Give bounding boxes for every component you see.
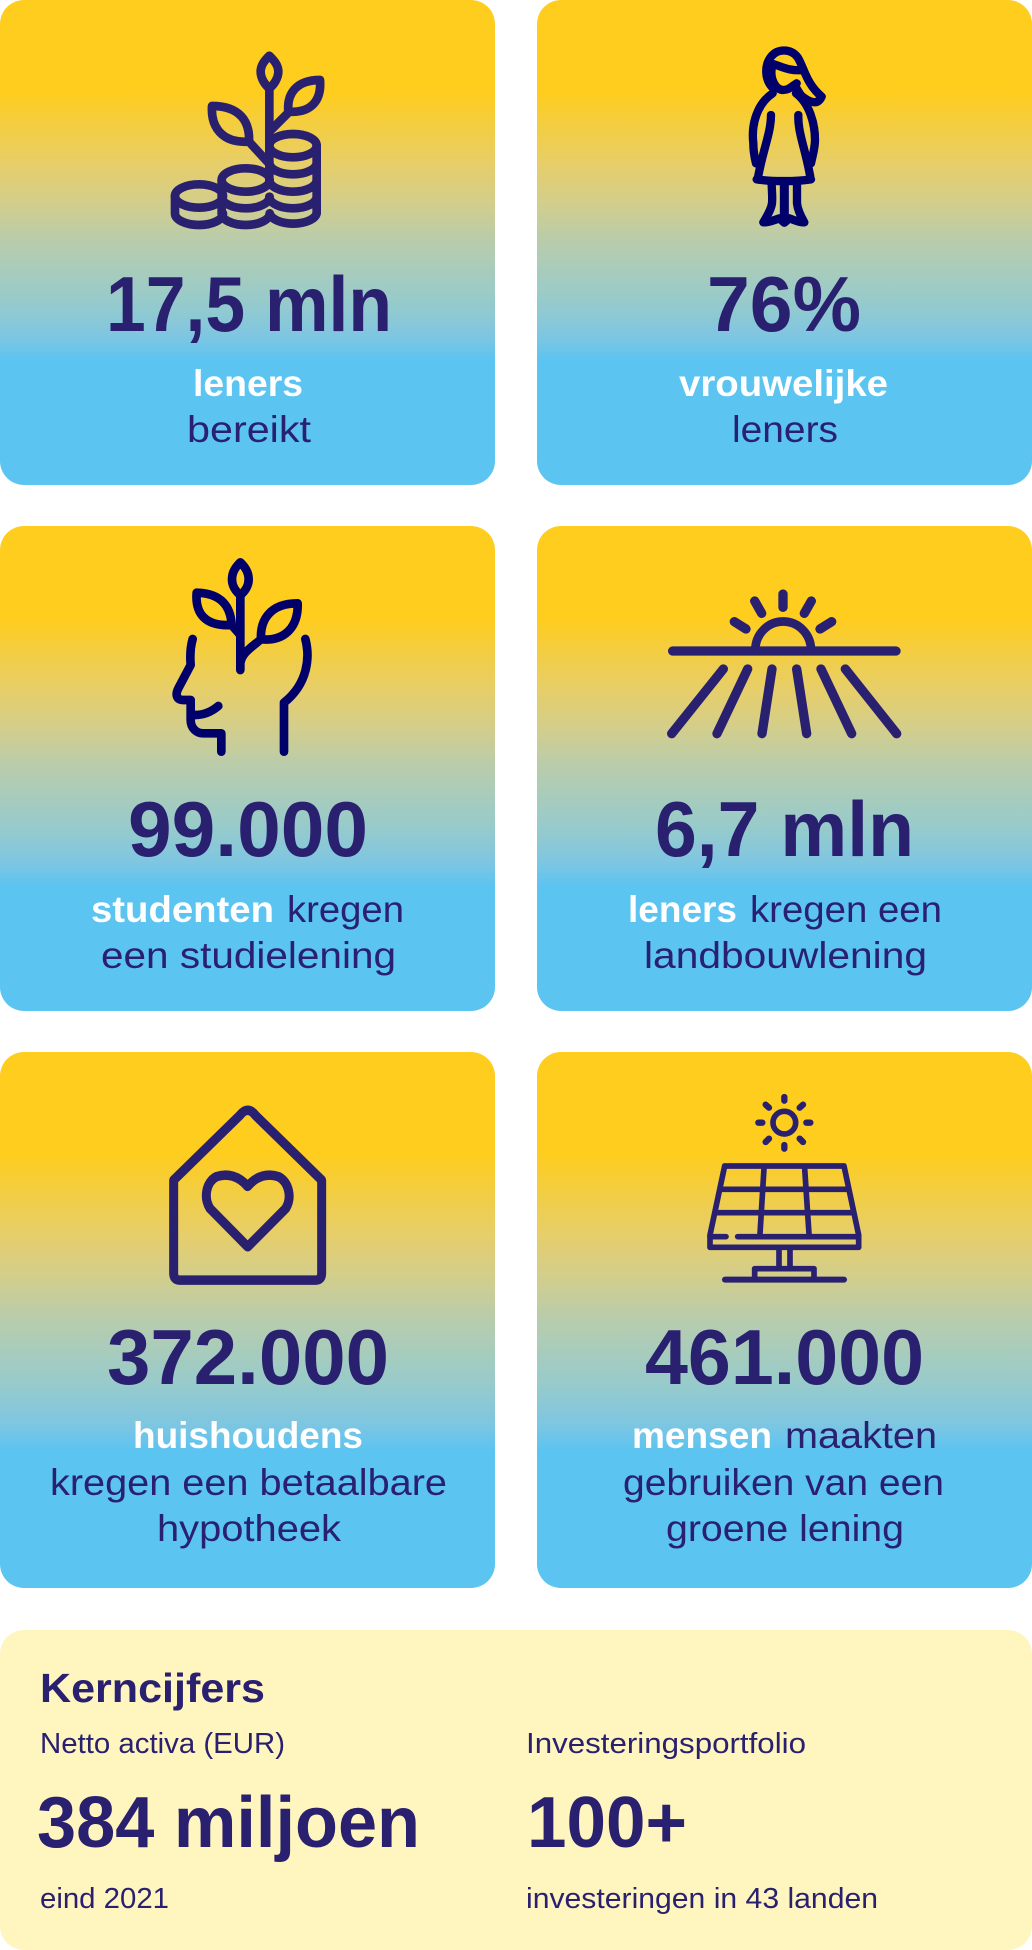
column: investeringsportfolio <box>526 1728 878 1915</box>
label: studenten kregen een studielening <box>91 889 404 976</box>
panel: kerncijfers <box>0 1630 1032 1950</box>
number: 6,7 mln: 6,7 mln <box>655 785 914 873</box>
column: investeringsportfolio: investeringen in 43 landen <box>526 1883 878 1915</box>
label: huishoudens kregen een betaalbare hypotheek: kregen een betaalbare <box>50 1462 447 1503</box>
column: netto activa: eind 2021 <box>40 1883 169 1915</box>
column: investeringsportfolio: 100+ <box>527 1783 687 1863</box>
panel: leners bereikt <box>0 0 495 485</box>
label: mensen maakten gebruiken van een groene lening <box>623 1415 944 1549</box>
panel: huishoudens <box>0 1052 495 1588</box>
column: investeringsportfolio: Investeringsportfolio <box>526 1728 806 1760</box>
number: 76%: 76% <box>707 260 861 348</box>
label: mensen maakten gebruiken van een groene lening: maakten <box>785 1415 937 1456</box>
label: vrouwelijke leners: leners <box>732 409 838 450</box>
icon: woman <box>753 50 822 223</box>
panel: vrouwelijke leners <box>537 0 1032 485</box>
label: studenten kregen een studielening: kregen <box>287 889 404 930</box>
label: mensen maakten gebruiken van een groene lening: groene lening <box>666 1508 904 1549</box>
label: leners kregen een landbouwlening <box>628 889 942 976</box>
label: leners kregen een landbouwlening: landbouwlening <box>644 935 927 976</box>
icon: sun over field <box>672 594 897 734</box>
column: netto activa <box>37 1728 420 1915</box>
label: studenten kregen een studielening: studenten <box>91 889 274 930</box>
label: leners kregen een landbouwlening: kregen een <box>750 889 942 930</box>
label: leners kregen een landbouwlening: leners <box>628 889 737 930</box>
label: leners bereikt <box>187 363 312 450</box>
label: studenten kregen een studielening: een studielening <box>101 935 396 976</box>
number: 17,5 mln: 17,5 mln <box>106 260 392 348</box>
panel: landbouwlening <box>537 526 1032 1011</box>
number: 461.000: 461.000 <box>645 1313 924 1401</box>
heading: Kerncijfers: Kerncijfers <box>40 1665 265 1711</box>
panel: studenten <box>0 526 495 1011</box>
icon: coins with plant <box>175 56 320 225</box>
column: netto activa: 384 miljoen <box>37 1783 420 1863</box>
label: huishoudens kregen een betaalbare hypotheek <box>50 1415 447 1549</box>
label: huishoudens kregen een betaalbare hypotheek: huishoudens <box>133 1415 363 1456</box>
label: huishoudens kregen een betaalbare hypotheek: hypotheek <box>157 1508 342 1549</box>
label: vrouwelijke leners <box>679 363 888 450</box>
number: 372.000: 372.000 <box>107 1313 389 1401</box>
column: netto activa: Netto activa (EUR) <box>40 1728 285 1760</box>
label: mensen maakten gebruiken van een groene lening: gebruiken van een <box>623 1462 944 1503</box>
icon: head with plant <box>177 562 307 752</box>
label: leners bereikt: leners <box>193 363 303 404</box>
icon: solar panel with sun <box>710 1097 859 1280</box>
label: vrouwelijke leners: vrouwelijke <box>679 363 888 404</box>
label: mensen maakten gebruiken van een groene lening: mensen <box>632 1415 772 1456</box>
panel: groene lening <box>537 1052 1032 1588</box>
number: 99.000: 99.000 <box>128 785 368 873</box>
label: leners bereikt: bereikt <box>187 409 312 450</box>
icon: house with heart <box>174 1110 322 1280</box>
